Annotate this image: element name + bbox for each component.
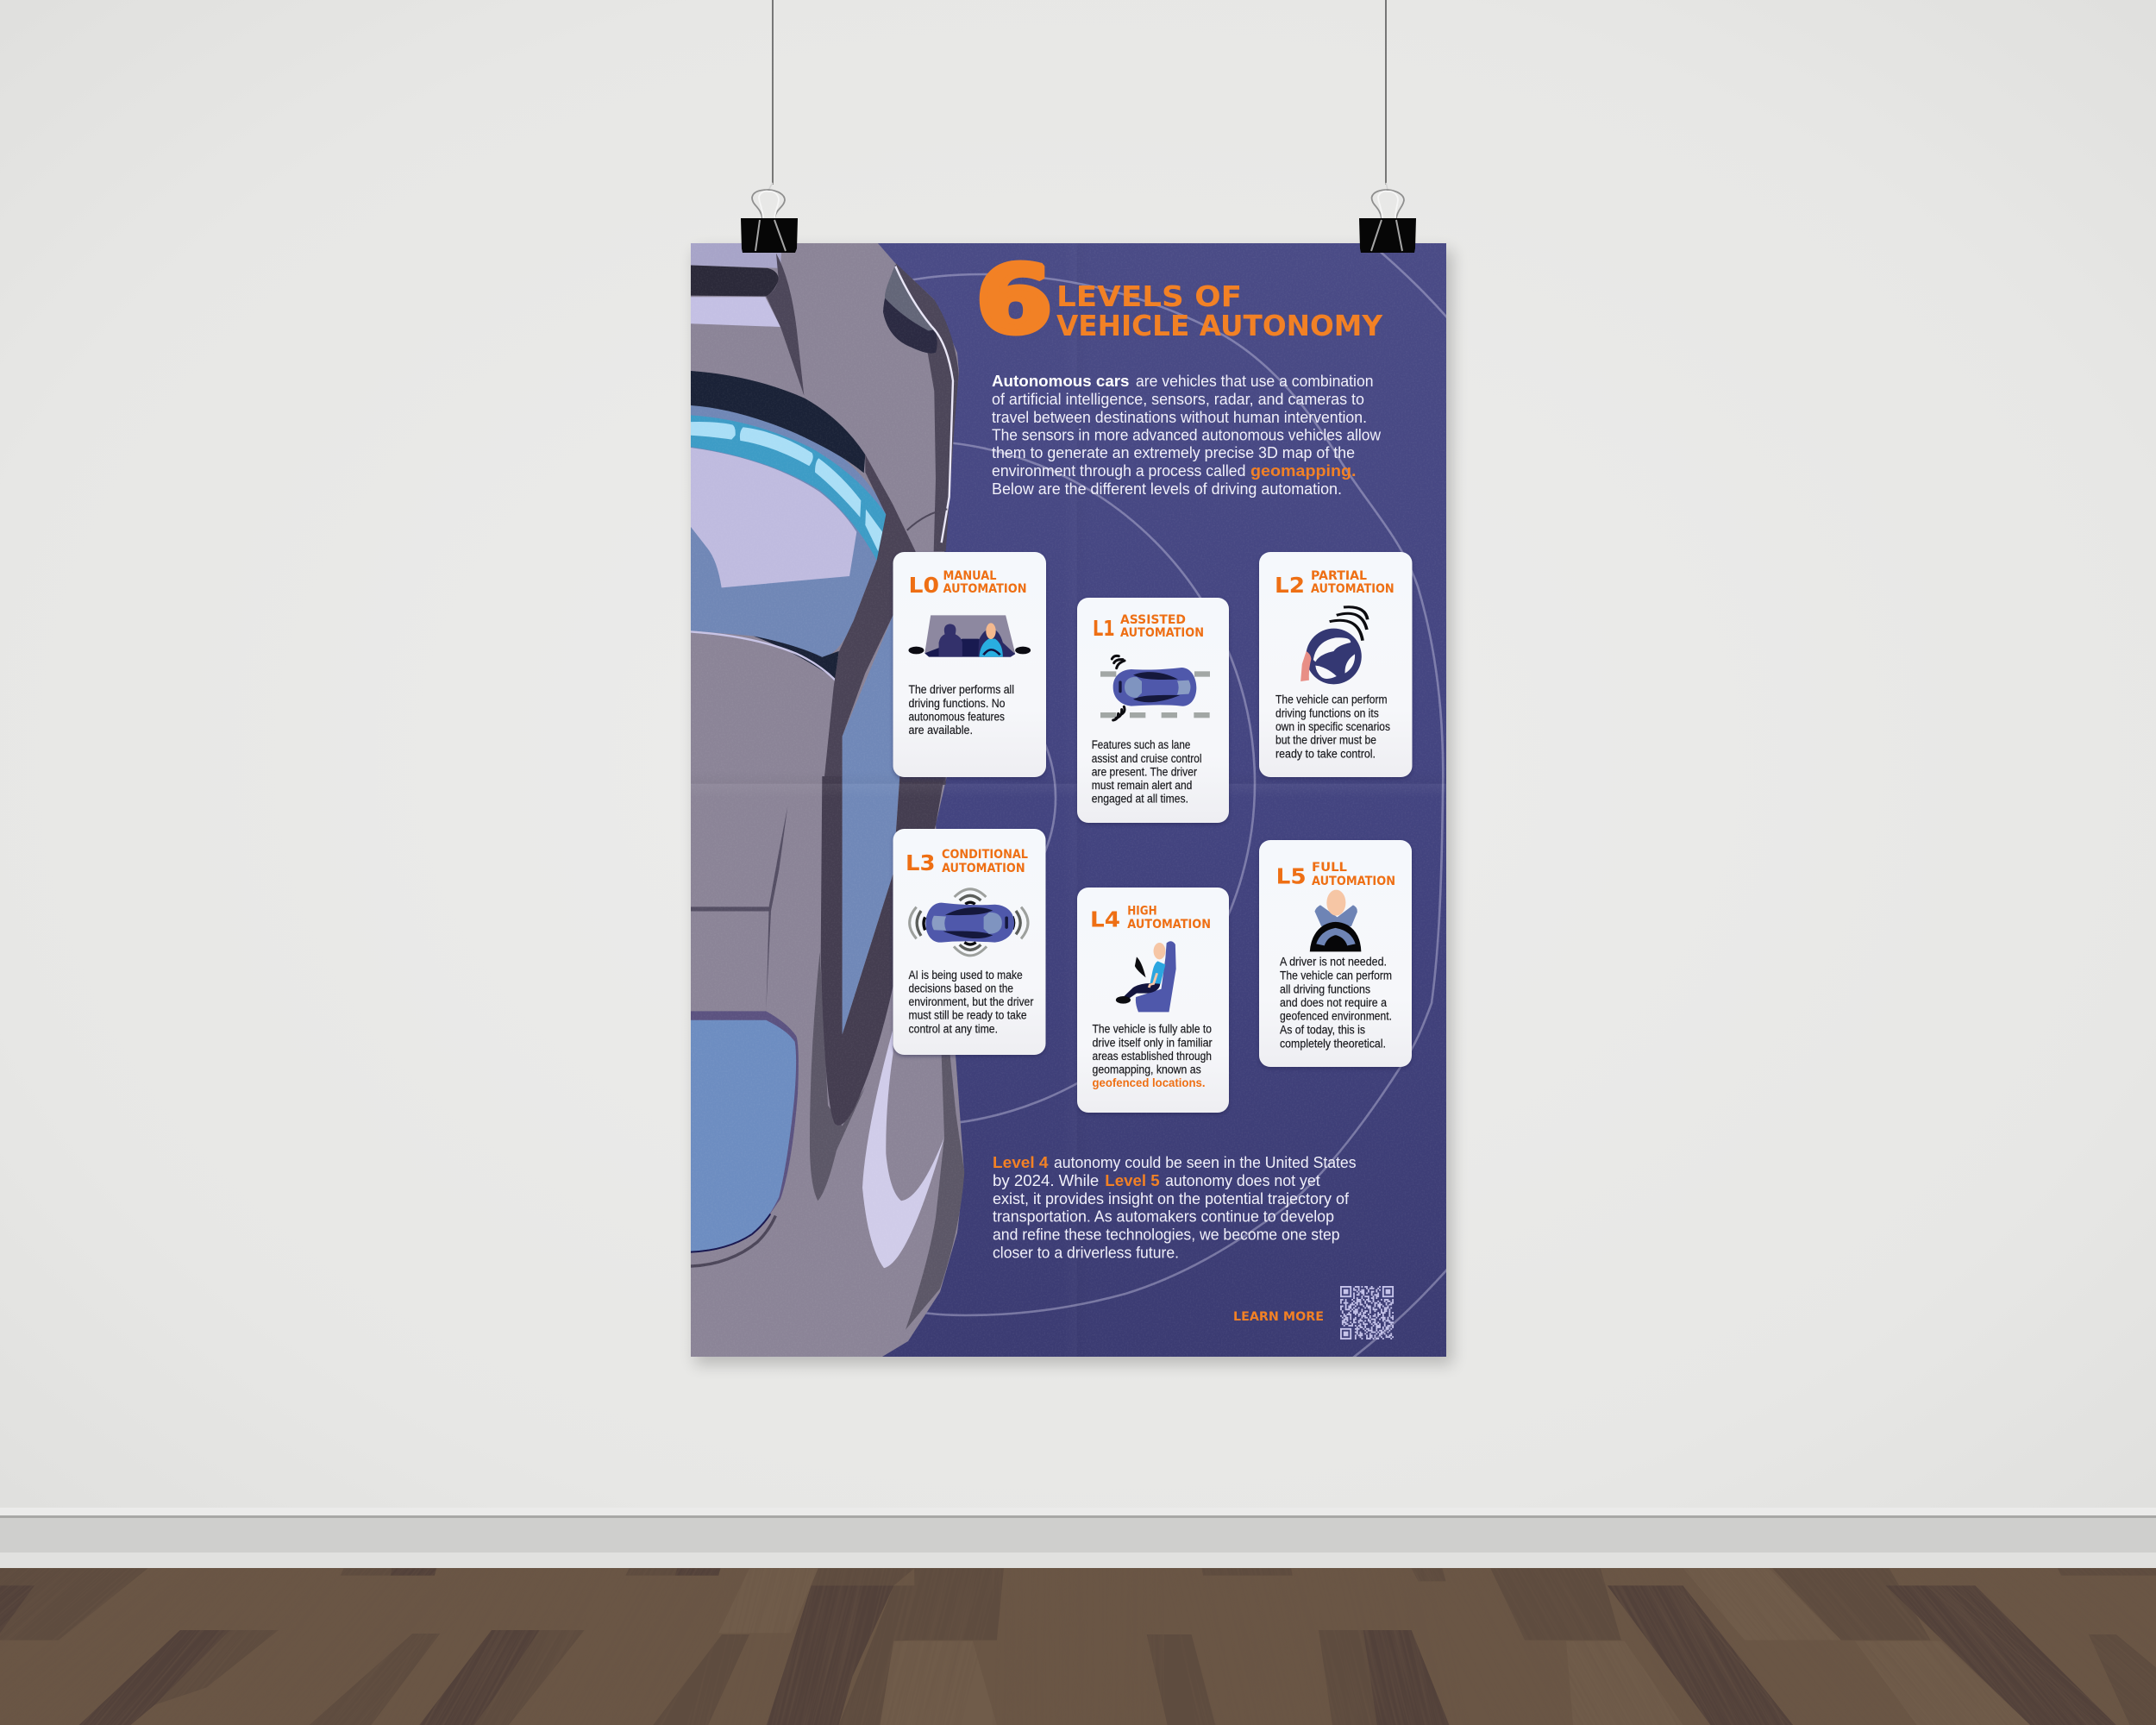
icon: car with lane assist	[1100, 656, 1210, 720]
closing paragraph: Level 5	[1105, 1172, 1160, 1189]
cyan light band	[691, 415, 886, 561]
L3 description: decisions based on the	[909, 982, 1013, 994]
L1 heading: ASSISTED	[1120, 613, 1186, 627]
hood edge line	[691, 631, 835, 680]
L5 description: A driver is not needed.	[1280, 956, 1387, 969]
fold creases	[691, 243, 1446, 1357]
L5 heading: L5	[1276, 864, 1307, 889]
L3 heading	[906, 848, 1028, 875]
title numeral 6: 6	[976, 247, 1052, 354]
L4 heading: AUTOMATION	[1127, 918, 1211, 932]
L3 heading: L3	[906, 850, 935, 875]
side pillar	[895, 263, 959, 551]
windshield wiper shadow	[753, 636, 839, 680]
intro paragraph: travel between destinations without human intervention.	[992, 409, 1367, 426]
L2 heading: L2	[1275, 573, 1305, 598]
intro paragraph: are vehicles that use a combination	[1136, 373, 1373, 390]
lower pillar sheath	[810, 952, 865, 1201]
roof lilac strip	[691, 242, 782, 268]
L0 description: are available.	[909, 724, 973, 737]
L5 description: geofenced environment.	[1280, 1010, 1392, 1023]
illustration: car hood and windshield	[691, 242, 964, 1357]
closing paragraph: exist, it provides insight on the potential trajectory of	[993, 1190, 1350, 1208]
upper car shapes	[691, 242, 959, 785]
poster	[691, 243, 1446, 1357]
L4 description: drive itself only in familiar	[1092, 1036, 1213, 1049]
closing paragraph: Level 4	[993, 1154, 1049, 1171]
blue side panel	[843, 615, 899, 785]
intro paragraph: of artificial intelligence, sensors, radar, and cameras to	[992, 391, 1364, 408]
binder clip right	[1359, 183, 1416, 253]
L2 description: but the driver must be	[1275, 734, 1376, 747]
L2 description: The vehicle can perform	[1275, 693, 1388, 706]
icon: steering wheel with hand	[1300, 607, 1368, 684]
hood crease horizontal	[691, 906, 770, 912]
wood floor	[0, 1568, 2156, 1725]
paper grain	[691, 243, 1446, 1357]
hood crease spike	[766, 806, 787, 1010]
L1 heading: L1	[1093, 616, 1115, 641]
small door curve	[907, 509, 947, 530]
L0 description: The driver performs all	[909, 683, 1014, 696]
card L5	[1259, 840, 1412, 1069]
poster navy background	[878, 243, 1446, 1357]
roof spike crease	[766, 254, 804, 396]
headlight border	[691, 1011, 799, 1247]
side glass	[843, 776, 899, 1034]
card L1	[1077, 598, 1229, 825]
car body top view	[925, 903, 1014, 943]
poster shadow	[695, 250, 1452, 1364]
headlight lower curve	[691, 1214, 770, 1252]
L5 description	[1280, 956, 1392, 1050]
L0 heading	[909, 569, 1026, 598]
L4 heading	[1090, 904, 1211, 932]
sensor waves	[910, 889, 1028, 956]
bumper curve	[691, 1216, 775, 1266]
intro paragraph: The sensors in more advanced autonomous vehicles allow	[992, 426, 1382, 443]
closing paragraph: autonomy does not yet	[1165, 1172, 1320, 1189]
L4 description: geofenced locations.	[1092, 1076, 1206, 1089]
card L0	[893, 552, 1046, 779]
mirror highlight line	[895, 267, 953, 543]
L2 description: own in specific scenarios	[1275, 720, 1390, 733]
L4 heading: HIGH	[1127, 904, 1157, 918]
closing paragraph: closer to a driverless future.	[993, 1244, 1179, 1261]
L5 description: The vehicle can perform	[1280, 969, 1392, 982]
icon: relaxed person in seat	[1116, 941, 1176, 1012]
L5 heading: FULL	[1312, 861, 1347, 875]
L0 heading: AUTOMATION	[943, 582, 1026, 596]
closing paragraph	[993, 1154, 1356, 1261]
closing paragraph: by 2024. While	[993, 1172, 1099, 1189]
L3 description: control at any time.	[909, 1022, 998, 1035]
L0 description: driving functions. No	[909, 697, 1006, 710]
intro paragraph: Autonomous cars	[992, 373, 1130, 390]
L5 heading	[1276, 861, 1395, 889]
L1 heading: AUTOMATION	[1120, 626, 1204, 640]
title line 2: VEHICLE AUTONOMY	[1056, 309, 1383, 342]
lilac roof panel	[691, 297, 780, 327]
dark side strip	[893, 776, 944, 986]
learn more label: LEARN MORE	[1233, 1310, 1324, 1324]
closing paragraph: transportation. As automakers continue to develop	[993, 1208, 1334, 1226]
windshield top black band	[691, 371, 865, 473]
L5 description: As of today, this is	[1280, 1024, 1365, 1037]
L1 description: engaged at all times.	[1092, 793, 1188, 806]
intro paragraph: them to generate an extremely precise 3D map of the	[992, 444, 1355, 461]
L1 description	[1092, 738, 1202, 806]
L1 description: must remain alert and	[1092, 779, 1192, 792]
QR code	[1340, 1286, 1394, 1339]
binder clip left	[741, 183, 798, 253]
L1 description: assist and cruise control	[1092, 752, 1202, 765]
lower pillar core	[821, 776, 893, 1126]
L5 description: all driving functions	[1280, 982, 1370, 995]
windshield main glass	[691, 405, 887, 657]
card L4	[1077, 888, 1229, 1114]
L3 heading: CONDITIONAL	[942, 848, 1028, 862]
dark rocker	[899, 551, 946, 785]
icon: hands behind head, wheel	[1310, 890, 1361, 951]
intro paragraph	[992, 373, 1382, 498]
L1 description: Features such as lane	[1092, 738, 1190, 751]
L4 description: The vehicle is fully able to	[1092, 1023, 1212, 1036]
intro paragraph: Below are the different levels of driving automation.	[992, 480, 1342, 498]
intro paragraph: environment through a process called	[992, 462, 1245, 480]
L3 description: must still be ready to take	[909, 1009, 1027, 1022]
L2 description: ready to take control.	[1275, 747, 1376, 760]
L0 description	[909, 683, 1014, 737]
L4 description: geomapping, known as	[1092, 1063, 1201, 1076]
hanging wires	[773, 0, 1386, 185]
baseboard	[0, 1508, 2156, 1568]
L5 description: completely theoretical.	[1280, 1037, 1386, 1050]
card L2	[1259, 552, 1413, 779]
title	[976, 247, 1383, 354]
L2 description	[1275, 693, 1390, 760]
L2 heading	[1275, 569, 1395, 598]
L0 heading: MANUAL	[943, 569, 997, 583]
intro paragraph: geomapping.	[1250, 462, 1356, 480]
L1 heading	[1093, 613, 1204, 641]
headlight glass	[691, 1020, 796, 1252]
L4 description: areas established through	[1092, 1050, 1212, 1063]
L2 heading: PARTIAL	[1311, 569, 1367, 583]
lilac windshield reflection	[691, 448, 856, 587]
L4 heading: L4	[1090, 907, 1120, 932]
icon: driver in car front view	[908, 615, 1031, 657]
L3 heading: AUTOMATION	[942, 862, 1025, 875]
card L3	[893, 829, 1045, 1057]
A pillar	[824, 455, 916, 785]
L2 heading: AUTOMATION	[1311, 582, 1395, 596]
L5 heading: AUTOMATION	[1312, 875, 1395, 888]
L3 description	[909, 969, 1034, 1035]
L3 description: environment, but the driver	[909, 995, 1034, 1008]
title line 1: LEVELS OF	[1056, 279, 1242, 313]
icon: car with sensors all around	[910, 889, 1028, 956]
roof dark bar	[691, 266, 779, 296]
lower car shapes	[691, 776, 964, 1330]
L5 description: and does not require a	[1280, 996, 1387, 1009]
wheel arch dark strip	[906, 1055, 964, 1330]
side mirror light	[885, 266, 934, 330]
closing paragraph: autonomy could be seen in the United States	[1054, 1154, 1356, 1171]
car body silhouette	[691, 243, 964, 1357]
hood swoosh highlight	[862, 1031, 944, 1268]
closing paragraph: and refine these technologies, we become one step	[993, 1226, 1340, 1243]
L1 description: are present. The driver	[1092, 766, 1197, 779]
L4 description	[1092, 1023, 1213, 1089]
L0 description: autonomous features	[909, 711, 1005, 723]
concentric radar arcs	[912, 253, 1446, 1357]
L3 description: AI is being used to make	[909, 969, 1023, 982]
L2 description: driving functions on its	[1275, 706, 1379, 719]
light segments	[691, 422, 882, 551]
side mirror dark	[883, 265, 937, 354]
L0 heading: L0	[909, 573, 939, 598]
